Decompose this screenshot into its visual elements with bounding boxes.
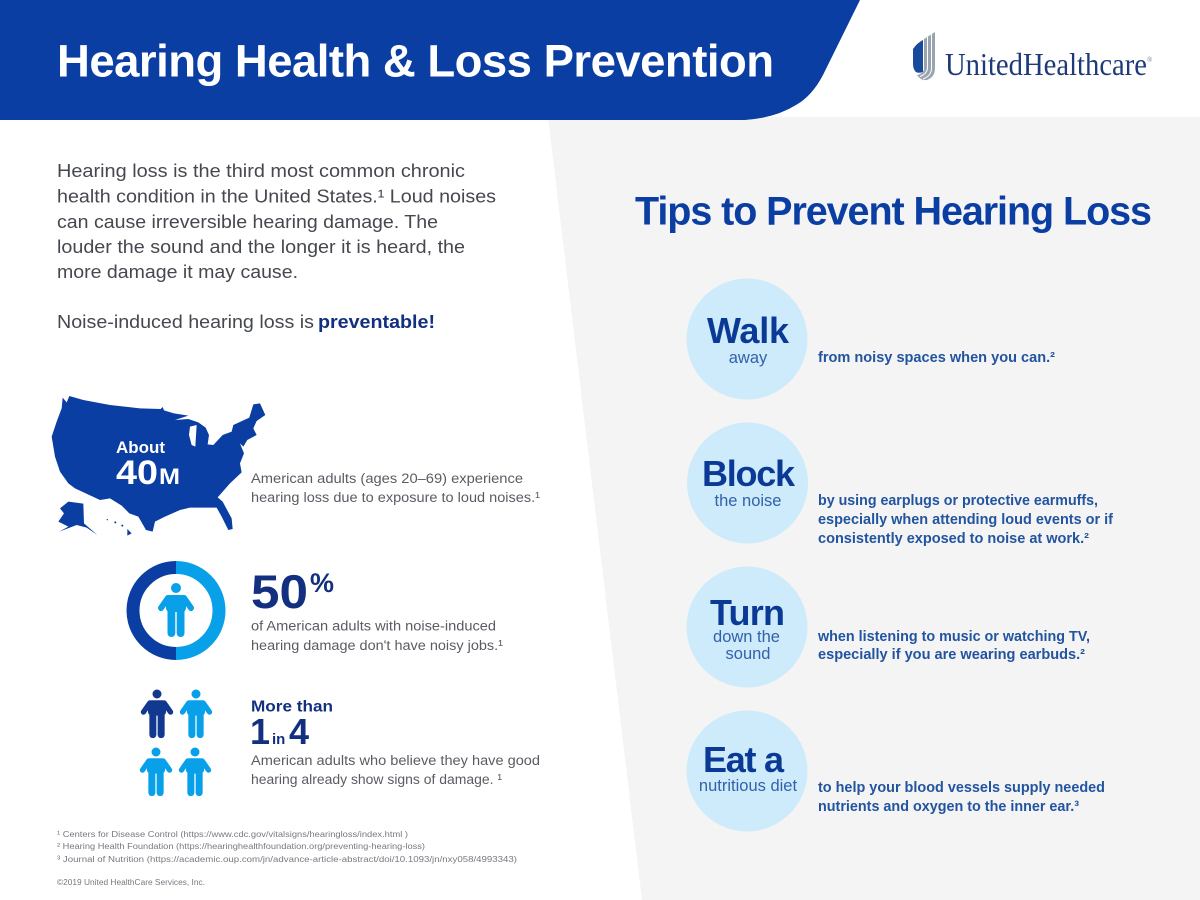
preventable statement: preventable!: [318, 311, 435, 332]
stat: 1 in 4: American adults who believe they have good: [251, 753, 540, 769]
stat: 50 percent: of American adults with noise-induced: [251, 618, 496, 634]
tip: turn down the sound: sound: [726, 645, 770, 663]
map label: [116, 439, 180, 492]
intro text block: can cause irreversible hearing damage. The: [57, 211, 438, 232]
tip: eat a nutritious diet: [686, 710, 1105, 832]
heading: tips: Tips to Prevent Hearing Loss: [635, 190, 1152, 234]
tip: block the noise: consistently exposed to noise at work.²: [818, 531, 1089, 547]
stat: 40 million text: [251, 471, 540, 506]
tip: block the noise: by using earplugs or protective earmuffs,: [818, 493, 1098, 509]
icon: US map: [52, 396, 265, 536]
preventable statement: Noise-induced hearing loss is: [57, 311, 314, 332]
footnotes: [57, 829, 517, 887]
panel: tips background: [548, 117, 1200, 900]
title: Hearing Health & Loss Prevention: [57, 36, 774, 86]
tip: block the noise: Block: [702, 453, 796, 494]
stat: 1 in 4: [250, 698, 540, 788]
tip: eat a nutritious diet: to help your blood vessels supply needed: [818, 780, 1105, 796]
tip: eat a nutritious diet: nutrients and oxygen to the inner ear.³: [818, 799, 1079, 815]
header banner: [0, 0, 860, 120]
map label: M: [159, 464, 180, 489]
map label: 40: [116, 454, 158, 492]
stat: 1 in 4: in: [272, 731, 285, 748]
stat: 50 percent: %: [310, 568, 334, 598]
stat: 40 million text: American adults (ages 20–69) experience: [251, 471, 523, 487]
icon: donut with person: [133, 568, 219, 654]
stat: 1 in 4: hearing already show signs of damage. ¹: [251, 772, 502, 788]
footnotes: ©2019 United HealthCare Services, Inc.: [57, 877, 205, 887]
tip: walk away: [686, 278, 1055, 400]
intro text block: [57, 160, 496, 282]
stat: 50 percent: hearing damage don't have noisy jobs.¹: [251, 638, 503, 654]
footnotes: ³ Journal of Nutrition (https://academic.oup.com/jn/advance-article-abstract/doi/10.1093/jn/nxy058/4993343): [57, 854, 517, 864]
stat: 40 million text: hearing loss due to exposure to loud noises.¹: [251, 490, 540, 506]
stat: 50 percent: 50: [251, 565, 308, 618]
logo: UnitedHealthcare: [913, 32, 1153, 82]
tip: walk away: Walk: [707, 310, 790, 351]
tip: block the noise: [687, 422, 1113, 547]
tip: turn down the sound: down the: [713, 628, 780, 646]
tip: turn down the sound: [686, 566, 1090, 688]
logo: UnitedHealthcare: UnitedHealthcare: [945, 46, 1147, 82]
tip: block the noise: especially when attending loud events or if: [818, 512, 1113, 528]
tip: walk away: away: [729, 349, 768, 367]
intro text block: louder the sound and the longer it is heard, the: [57, 236, 465, 257]
stat: 1 in 4: 4: [289, 711, 309, 752]
stat: 1 in 4: More than: [251, 698, 333, 716]
tip: turn down the sound: when listening to music or watching TV,: [817, 629, 1090, 645]
tip: eat a nutritious diet: nutritious diet: [699, 777, 797, 795]
footnotes: ² Hearing Health Foundation (https://hearinghealthfoundation.org/preventing-hearing-loss): [57, 841, 425, 851]
preventable statement: [57, 311, 435, 332]
intro text block: more damage it may cause.: [57, 261, 298, 282]
logo: UnitedHealthcare: ®: [1147, 56, 1153, 64]
stat: 1 in 4: 1: [250, 711, 270, 752]
intro text block: health condition in the United States.¹ Loud noises: [57, 186, 496, 206]
map label: About: [116, 439, 166, 457]
tip: walk away: from noisy spaces when you can.²: [818, 350, 1055, 366]
tip: turn down the sound: especially if you are wearing earbuds.²: [818, 647, 1085, 663]
icon: four people: [142, 690, 210, 796]
intro text block: Hearing loss is the third most common chronic: [57, 160, 465, 181]
stat: 50 percent: [251, 565, 503, 654]
tip: eat a nutritious diet: Eat a: [703, 739, 785, 780]
tip: block the noise: the noise: [715, 492, 781, 510]
tip: turn down the sound: Turn: [710, 592, 785, 633]
footnotes: ¹ Centers for Disease Control (https://www.cdc.gov/vitalsigns/hearingloss/index.html ): [57, 829, 408, 839]
